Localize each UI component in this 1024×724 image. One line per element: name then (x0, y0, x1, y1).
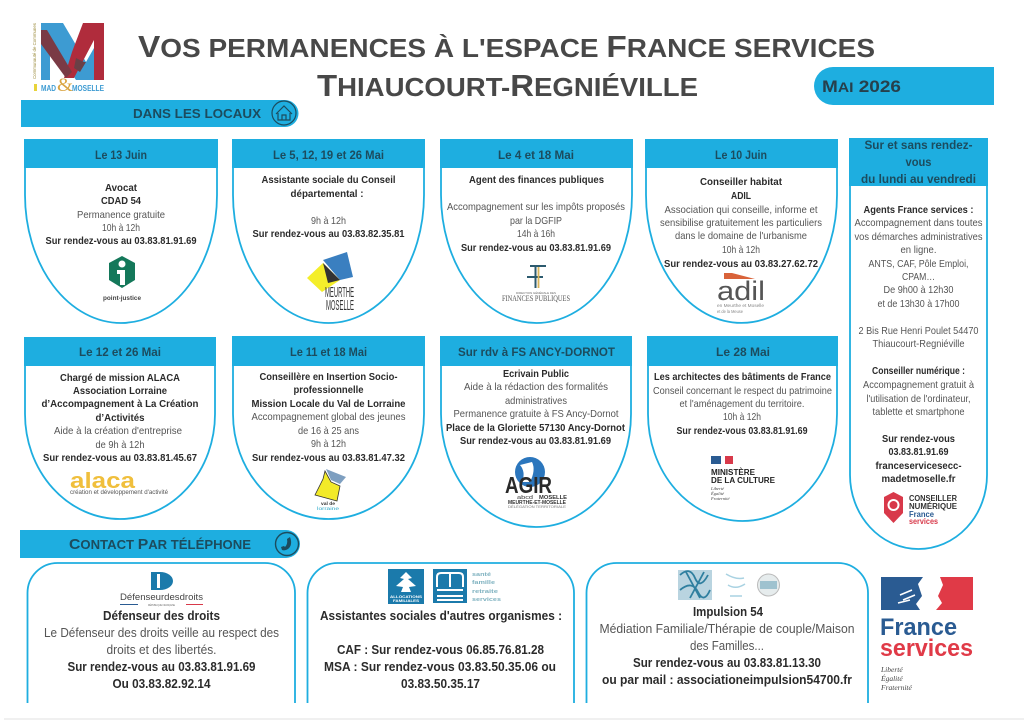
panel: Le 5, 12, 19 et 26 Mai (232, 139, 425, 323)
logo: MSA: famille (472, 580, 495, 586)
logo: MSA: santé (472, 572, 491, 578)
title: THIAUCOURT- REGNIÉVILLE (317, 68, 698, 103)
panel: Impulsion 54: Impulsion 54 (693, 605, 763, 619)
panel: Le 13 Juin: 10h à 12h (102, 222, 140, 234)
panel: Le 4 et 18 Mai: Accompagnement sur les impôts proposés (447, 201, 625, 213)
panel: Le 5, 12, 19 et 26 Mai: MOSELLE (326, 297, 354, 314)
panel: Impulsion 54: ou par mail : associationeimpulsion54700.fr (602, 673, 852, 687)
panel: Le 12 et 26 Mai: Le 12 et 26 Mai (79, 345, 161, 359)
panel: Défenseur des droits (28, 563, 295, 703)
logo: Ministère de la Culture: Liberté (710, 486, 725, 491)
logo: AGIR: abcd (517, 495, 533, 501)
logo: France services: Fraternité (880, 683, 912, 692)
panel: Sur et sans rendez-vous: franceservicesecc- (876, 460, 962, 472)
logo: point-justice (103, 256, 141, 302)
panel: Le 10 Juin: Conseiller habitat (700, 176, 782, 188)
panel: Le 10 Juin: Le 10 Juin (715, 148, 767, 162)
logo: Mad & Moselle: & (57, 75, 73, 96)
logo: Mad & Moselle: MAD (41, 84, 56, 93)
panel: Sur et sans rendez-vous: De 9h00 à 12h30 (884, 284, 954, 296)
logo: Mad & Moselle: Communauté de Communes (32, 22, 37, 79)
panel: Le 10 Juin: sensibilise gratuitement les particuliers (660, 217, 822, 229)
logo: Ministère de la Culture: Fraternité (710, 496, 730, 501)
logo: Finances publiques: DIRECTION GÉNÉRALE DES (516, 290, 556, 295)
panel: Le 11 et 18 Mai: Le 11 et 18 Mai (290, 345, 367, 359)
logo: Mad & Moselle (32, 22, 105, 96)
logo: Ministère de la Culture: DE LA CULTURE (711, 476, 776, 485)
panel: Le 12 et 26 Mai: de 9h à 12h (96, 439, 145, 451)
panel: Le 4 et 18 Mai: 14h à 16h (517, 228, 555, 240)
panel: Le 5, 12, 19 et 26 Mai: Assistante sociale du Conseil (262, 174, 396, 186)
panel: Le 5, 12, 19 et 26 Mai: Le 5, 12, 19 et 26 Mai (273, 148, 384, 162)
panel: Sur et sans rendez-vous: Accompagnement dans toutes (854, 217, 982, 229)
logo: CAF: ALLOCATIONS (390, 595, 423, 599)
panel: Le 12 et 26 Mai (24, 337, 216, 519)
logo: ADIL: adil (717, 276, 765, 306)
logo: MSA (433, 569, 501, 603)
panel: Sur rdv à FS Ancy-Dornot: Sur rdv à FS ANCY-DORNOT (458, 345, 616, 359)
panel: Le 13 Juin: Le 13 Juin (95, 148, 147, 162)
logo: Conseiller numérique: France (909, 510, 935, 519)
logo: val de lorraine: lorraine (317, 506, 340, 511)
panel: Sur rdv à FS Ancy-Dornot: Permanence gratuite à FS Ancy-Dornot (454, 408, 619, 420)
panel: Impulsion 54 (586, 563, 868, 703)
logo: AGIR: DÉLÉGATION TERRITORIALE (508, 504, 567, 509)
icon: house (272, 101, 296, 125)
panel: Le 12 et 26 Mai: Chargé de mission ALACA (60, 372, 180, 384)
panel: Sur et sans rendez-vous: 2 Bis Rue Henri Poulet 54470 (858, 325, 979, 337)
date pill (814, 67, 994, 105)
section bar: contact par téléphone: CONTACT PAR TÉLÉPHONE (69, 536, 251, 553)
panel: Le 5, 12, 19 et 26 Mai: 9h à 12h (311, 215, 346, 227)
logo: alaca: alaca (70, 468, 136, 493)
panel: Assistantes sociales: MSA : Sur rendez-vous 03.83.50.35.06 ou (324, 660, 556, 674)
logo: Meurthe et Moselle (307, 252, 354, 314)
logo: AGIR: AGIR (505, 472, 552, 498)
panel: Sur et sans rendez-vous: Sur et sans rendez- (864, 138, 973, 152)
panel: Le 11 et 18 Mai: Accompagnement global des jeunes (252, 411, 406, 423)
logo: Ministère de la Culture: Égalité (710, 491, 725, 496)
logo: Mad & Moselle: MOSELLE (72, 84, 105, 93)
logo: AGIR: MOSELLE (539, 495, 567, 501)
panel: Assistantes sociales (308, 563, 574, 703)
panel: Le 11 et 18 Mai: Sur rendez-vous au 03.83.81.47.32 (252, 452, 405, 464)
panel: Le 12 et 26 Mai: Sur rendez-vous au 03.83.81.45.67 (43, 452, 197, 464)
logo: MSA: retraite (472, 589, 498, 595)
panel: Sur et sans rendez-vous: du lundi au vendredi (861, 172, 976, 186)
logo: Finances publiques (502, 266, 570, 303)
panel: Le 28 Mai: Sur rendez-vous 03.83.81.91.69 (676, 425, 808, 437)
logo: AGIR (505, 457, 567, 509)
panel: Sur et sans rendez-vous: Conseiller numérique : (872, 365, 965, 377)
logo: ADIL: et de la Meuse (717, 309, 743, 314)
panel: Sur et sans rendez-vous: et de 13h30 à 17h00 (878, 298, 960, 310)
panel: Défenseur des droits: droits et des libertés. (106, 643, 216, 657)
panel: Sur et sans rendez-vous: 03.83.81.91.69 (888, 446, 949, 458)
logo: France services: France (880, 614, 957, 641)
panel: Le 10 Juin: Association qui conseille, informe et (664, 204, 818, 216)
panel: Impulsion 54: Sur rendez-vous au 03.83.81.13.30 (633, 656, 821, 670)
panel: Le 12 et 26 Mai: Association Lorraine (73, 385, 167, 397)
logo: France services (880, 577, 973, 692)
panel: Le 11 et 18 Mai: Mission Locale du Val de Lorraine (252, 398, 406, 410)
panel: Le 4 et 18 Mai: Agent des finances publiques (469, 174, 604, 186)
logo: CAF: FAMILIALES (393, 599, 420, 603)
panel: Sur et sans rendez-vous: madetmoselle.fr (882, 473, 956, 485)
logo: Conseiller numérique (884, 492, 958, 526)
panel: Le 13 Juin: CDAD 54 (101, 195, 141, 207)
panel: Sur et sans rendez-vous: Thiaucourt-Regniéville (872, 338, 965, 350)
logo: Conseiller numérique: services (909, 517, 938, 526)
panel: Le 10 Juin (645, 139, 838, 323)
panel: Le 5, 12, 19 et 26 Mai: Sur rendez-vous au 03.83.82.35.81 (252, 228, 405, 240)
panel: Le 28 Mai: et l'aménagement du territoire. (680, 398, 804, 410)
panel: Défenseur des droits: Défenseur des droits (103, 609, 220, 623)
panel: Le 28 Mai (647, 336, 838, 521)
icon: telephone (276, 532, 298, 556)
panel: Sur rdv à FS Ancy-Dornot (440, 336, 632, 527)
logos: Impulsion 54 partners (678, 570, 780, 600)
logo: Ministère de la Culture (710, 456, 776, 501)
panel: Sur et sans rendez-vous: Agents France services : (864, 204, 974, 216)
panel: Le 11 et 18 Mai (232, 336, 425, 519)
panel: Sur et sans rendez-vous: CPAM… (902, 271, 935, 283)
panel: Le 28 Mai: Le 28 Mai (716, 345, 770, 359)
logo: point-justice: point-justice (103, 295, 141, 302)
panel: Le 4 et 18 Mai: Sur rendez-vous au 03.83.81.91.69 (461, 242, 611, 254)
panel: Sur et sans rendez-vous: Sur rendez-vous (882, 433, 955, 445)
panel: Sur et sans rendez-vous: vous (906, 155, 932, 169)
panel: Impulsion 54: Médiation Familiale/Thérapie de couple/Maison (600, 622, 855, 636)
panel: Le 5, 12, 19 et 26 Mai: MEURTHE (325, 284, 354, 301)
panel: Assistantes sociales: CAF : Sur rendez-vous 06.85.76.81.28 (337, 643, 544, 657)
panel: Assistantes sociales: 03.83.50.35.17 (401, 677, 480, 691)
logo: val de lorraine (315, 469, 346, 511)
panel: Le 11 et 18 Mai: 9h à 12h (311, 438, 346, 450)
panel: Sur et sans rendez-vous (849, 138, 988, 549)
logo: Défenseur des droits (120, 572, 204, 607)
logo: France services: Égalité (880, 673, 903, 683)
section bar: dans les locaux: DANS LES LOCAUX (133, 107, 262, 121)
panel: Sur et sans rendez-vous: tablette et smartphone (872, 406, 965, 418)
logo: ADIL: en Meurthe et Moselle (717, 303, 765, 308)
panel: Le 5, 12, 19 et 26 Mai: départemental : (290, 188, 364, 200)
panel: Le 13 Juin (24, 139, 218, 323)
panel: Sur et sans rendez-vous: Accompagnement gratuit à (863, 379, 974, 391)
panel: Sur rdv à FS Ancy-Dornot: Ecrivain Public (503, 368, 569, 380)
panel: Le 11 et 18 Mai: professionnelle (294, 384, 364, 396)
panel: Le 12 et 26 Mai: d’Accompagnement à La Création (42, 398, 198, 410)
panel: Défenseur des droits: Sur rendez-vous au 03.83.81.91.69 (68, 660, 256, 674)
panel: Le 13 Juin: Sur rendez-vous au 03.83.81.91.69 (46, 235, 197, 247)
logo: Finances publiques: FINANCES PUBLIQUES (502, 294, 570, 303)
panel: Le 10 Juin: ADIL (731, 190, 751, 202)
panel: Défenseur des droits: Ou 03.83.82.92.14 (112, 677, 211, 691)
logo: CAF (388, 569, 424, 604)
panel: Assistantes sociales: Assistantes sociales d'autres organismes : (320, 609, 562, 623)
title (138, 29, 875, 103)
title: VOS PERMANENCES À L'ESPACE FRANCE SERVICES (138, 29, 875, 64)
panel: Sur rdv à FS Ancy-Dornot: Place de la Gloriette 57130 Ancy-Dornot (446, 422, 625, 434)
panel: Sur et sans rendez-vous: en ligne. (900, 244, 936, 256)
section bar: dans les locaux (21, 100, 298, 127)
logo: France services: Liberté (880, 665, 903, 674)
panel: Sur rdv à FS Ancy-Dornot: Sur rendez-vous au 03.83.81.91.69 (460, 435, 611, 447)
logo: Défenseur des droits: Défenseurdesdroits (120, 592, 204, 602)
panel: Le 10 Juin: 10h à 12h (722, 244, 760, 256)
logo: alaca: création et développement d'activité (70, 490, 169, 496)
panel: Le 13 Juin: Avocat (105, 182, 137, 194)
panel: Le 10 Juin: dans le domaine de l'urbanisme (675, 230, 807, 242)
logo: AGIR: MEURTHE-ET-MOSELLE (508, 500, 567, 506)
panel: Sur et sans rendez-vous: vos démarches administratives (854, 231, 982, 243)
panel: Le 11 et 18 Mai: Conseillère en Insertion Socio- (260, 371, 398, 383)
logo: France services: services (880, 635, 973, 662)
panel: Défenseur des droits: Le Défenseur des droits veille au respect des (44, 626, 279, 640)
panel: Le 4 et 18 Mai: Le 4 et 18 Mai (498, 148, 574, 162)
panel: Le 12 et 26 Mai: Aide à la création d'entreprise (54, 425, 182, 437)
panel: Le 10 Juin: Sur rendez-vous au 03.83.27.62.72 (664, 258, 818, 270)
logo: Conseiller numérique: CONSEILLER (909, 494, 957, 503)
panel: Le 11 et 18 Mai: de 16 à 25 ans (298, 425, 359, 437)
panel: Le 4 et 18 Mai (440, 139, 633, 323)
panel: Sur rdv à FS Ancy-Dornot: administratives (505, 395, 567, 407)
panel: Le 4 et 18 Mai: par la DGFIP (510, 215, 562, 227)
panel: Le 12 et 26 Mai: d’Activités (96, 412, 145, 424)
panel: Le 13 Juin: Permanence gratuite (77, 209, 165, 221)
section bar: contact par téléphone (20, 530, 300, 558)
panel: Sur rdv à FS Ancy-Dornot: Aide à la rédaction des formalités (464, 381, 608, 393)
logo: Défenseur des droits: RÉPUBLIQUE FRANÇAISE (148, 602, 175, 607)
panel: Le 28 Mai: Les architectes des bâtiments de France (654, 371, 831, 383)
logo: val de lorraine: val de (321, 501, 336, 506)
panel: Impulsion 54: des Familles... (690, 639, 764, 653)
panel: Sur et sans rendez-vous: l'utilisation de l'ordinateur, (866, 393, 970, 405)
logo: ADIL (717, 273, 765, 314)
date pill: MAI 2026 (822, 77, 901, 96)
panel: Le 28 Mai: Conseil concernant le respect du patrimoine (653, 385, 832, 397)
logo: Ministère de la Culture: MINISTÈRE (711, 468, 756, 477)
logo: MSA: services (472, 597, 501, 603)
logo: Conseiller numérique: NUMÉRIQUE (909, 502, 958, 511)
logo: alaca (70, 468, 169, 496)
panel: Le 28 Mai: 10h à 12h (723, 411, 761, 423)
panel: Sur et sans rendez-vous: ANTS, CAF, Pôle Emploi, (868, 258, 968, 270)
